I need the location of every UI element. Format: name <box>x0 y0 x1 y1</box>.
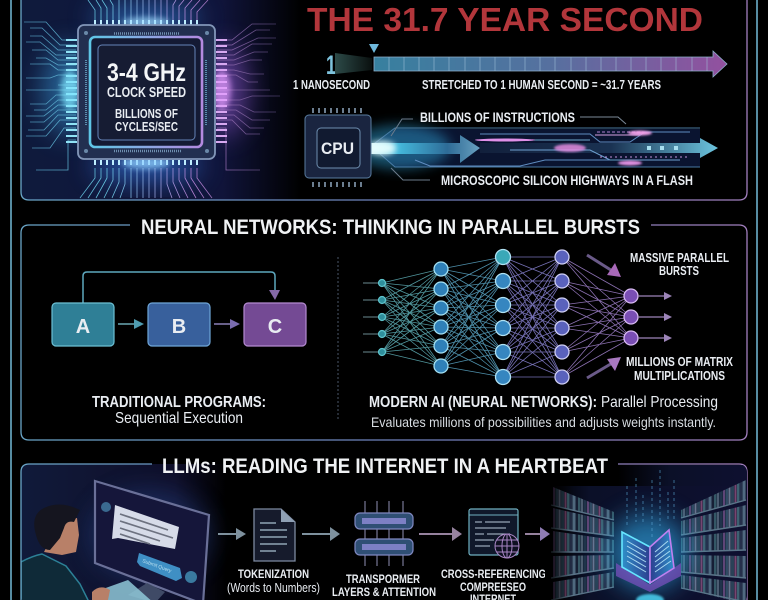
illustration: person at computer <box>21 481 210 600</box>
burst arrows <box>587 255 621 378</box>
chip text: CLOCK SPEED <box>107 84 186 101</box>
timeline: one nanosecond stretched <box>293 44 727 92</box>
tokenization label: (Words to Numbers) <box>227 580 320 595</box>
panel: clock speed and 31.7 year second <box>21 0 747 200</box>
illustration: glowing library and open book <box>545 465 747 600</box>
icon: document <box>254 509 295 561</box>
circuit traces <box>24 0 280 198</box>
arrow <box>419 527 462 541</box>
arrow <box>302 527 340 541</box>
cross-referencing label <box>441 567 546 600</box>
traditional programs caption: TRADITIONAL PROGRAMS: <box>92 394 266 411</box>
CPU data stream: BILLIONS OF INSTRUCTIONS <box>420 109 575 125</box>
modern AI caption: Parallel Processing <box>601 394 718 411</box>
panel: neural networks <box>21 216 747 440</box>
CPU data stream <box>305 108 718 188</box>
arrow <box>218 528 246 540</box>
chip text: CYCLES/SEC <box>115 119 178 134</box>
modern AI caption <box>369 394 718 430</box>
neural network diagram <box>363 250 672 384</box>
CPU icon <box>305 108 371 187</box>
heading: NEURAL NETWORKS: THINKING IN PARALLEL BURSTS <box>141 216 640 239</box>
chip text <box>107 59 186 134</box>
cross-referencing label: CROSS-REFERENCING <box>441 567 546 581</box>
modern AI caption: Evaluates millions of possibilities and adjusts weights instantly. <box>371 414 716 430</box>
sequential flow diagram: B <box>172 316 186 338</box>
transformer label: TRANSPORMER <box>346 572 420 586</box>
traditional programs caption <box>92 394 266 427</box>
timeline: one nanosecond stretched: 1 NANOSECOND <box>293 78 370 92</box>
icon: transformer layers <box>355 501 413 566</box>
callouts <box>391 119 413 136</box>
timeline: one nanosecond stretched: 1 <box>326 50 336 80</box>
CPU icon: CPU <box>321 139 354 158</box>
network callouts: MASSIVE PARALLEL <box>630 251 729 265</box>
transformer label: LAYERS & ATTENTION <box>332 585 436 599</box>
arrow <box>525 527 550 541</box>
tokenization label: TOKENIZATION <box>238 567 309 581</box>
panel: LLMs <box>21 455 747 600</box>
tokenization label <box>227 567 320 595</box>
CPU data stream: MICROSCOPIC SILICON HIGHWAYS IN A FLASH <box>441 172 693 188</box>
traditional programs caption: Sequential Execution <box>115 410 243 427</box>
chip text: 3-4 GHz <box>107 59 186 87</box>
heading: LLMs: READING THE INTERNET IN A HEARTBEAT <box>162 455 608 478</box>
icon: cross-referencing window and globe <box>469 509 519 558</box>
network callouts: MULTIPLICATIONS <box>634 369 725 383</box>
title: THE 31.7 YEAR SECOND <box>307 1 703 38</box>
sequential flow diagram: C <box>268 316 282 338</box>
cross-referencing label: COMPREESEO <box>460 580 526 594</box>
illustration: person at computer: Submit Query <box>141 558 173 575</box>
network callouts <box>626 251 734 383</box>
transformer label <box>332 572 436 599</box>
chip pins <box>94 20 198 165</box>
panel border <box>21 0 747 200</box>
sequential flow diagram <box>52 272 306 346</box>
chip text: BILLIONS OF <box>115 106 178 121</box>
network callouts: BURSTS <box>659 264 699 278</box>
sequential flow diagram: A <box>76 316 90 338</box>
network callouts: MILLIONS OF MATRIX <box>626 355 734 369</box>
timeline: one nanosecond stretched: STRETCHED TO 1 HUMAN SECOND = ~31.7 YEARS <box>422 78 661 92</box>
modern AI caption: MODERN AI (NEURAL NETWORKS): <box>369 394 597 411</box>
chip body <box>78 25 215 159</box>
chip illustration <box>21 0 301 200</box>
